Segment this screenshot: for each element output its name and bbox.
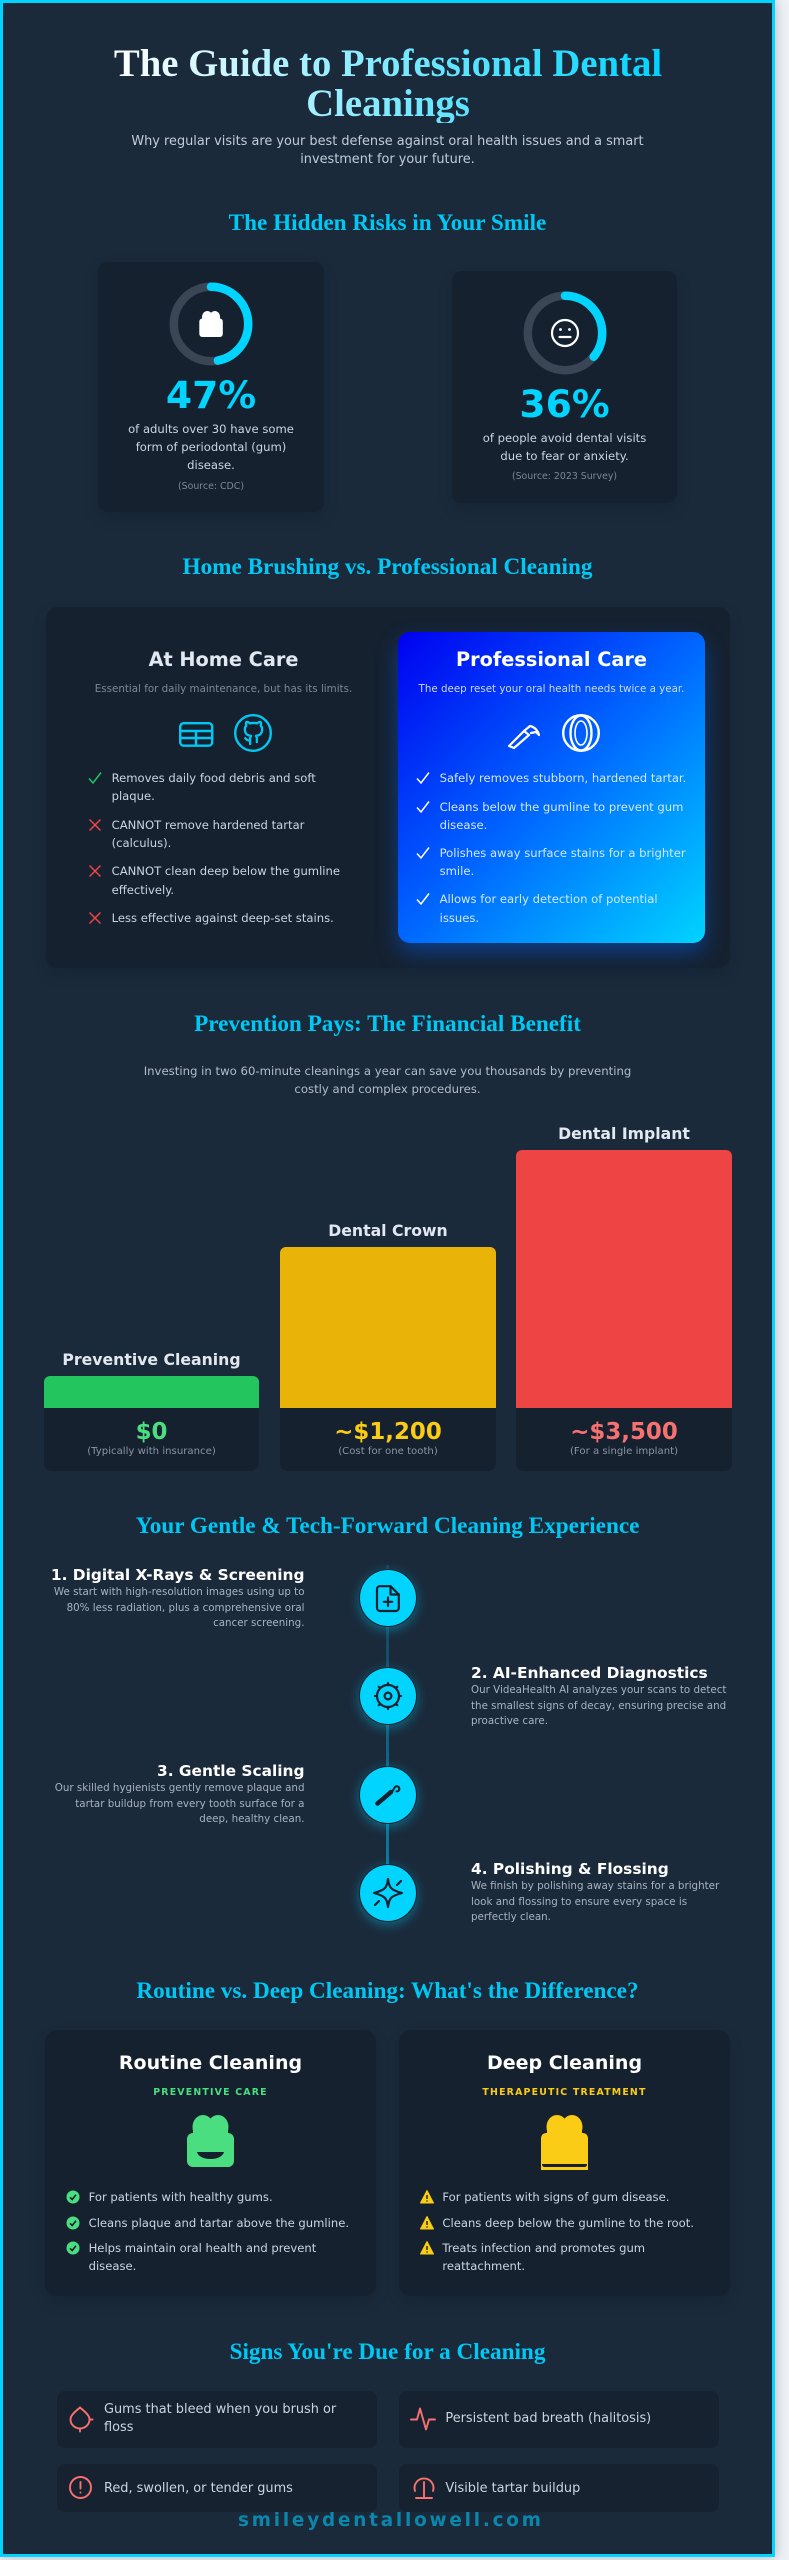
sign: tartar buildup [399,2464,719,2512]
step 3 icon [360,1767,416,1823]
home list item: cross [89,818,304,850]
home list item: check: Removes daily food debris and soft [112,771,316,785]
sign: red gums [57,2464,377,2512]
timeline connector [386,1565,389,1906]
step 4 description: We finish by polishing away stains for a brighter [471,1880,719,1892]
icon: github circle [234,714,272,752]
stat description: form of periodontal (gum) [136,440,286,454]
step 2 text [471,1664,726,1727]
footer website: smileydentallowell.com [238,2510,544,2531]
heading: signs: Signs You're Due for a Cleaning [230,2339,545,2365]
step 2 description [471,1684,726,1727]
sign: bleeding gums [57,2391,377,2448]
step 3 description: Our skilled hygienists gently remove plaque and [55,1782,304,1794]
sign text: Red, swollen, or tender gums [104,2480,293,2496]
stat description [128,422,294,472]
subtitle [131,134,644,166]
home list item: check [88,771,316,803]
subtitle: investment for your future. [300,152,475,166]
bar value box [280,1408,496,1471]
icon: pulse [410,2407,436,2431]
bar label: Dental Crown [328,1221,448,1240]
panel: deep cleaning [399,2030,730,2296]
pro list item: disease. [440,818,487,832]
routine item [66,2241,316,2273]
donut chart with tooth icon [170,282,252,366]
deep title: Deep Cleaning [487,2052,642,2074]
bar value box [516,1408,732,1471]
step 3 description: tartar buildup from every tooth surface for a [75,1798,304,1810]
value: ~$1,200 [334,1419,442,1445]
heading: financial benefit: Prevention Pays: The Financial Benefit [194,1010,581,1036]
deep tag: THERAPEUTIC TREATMENT [482,2087,647,2098]
step 1 text [51,1566,304,1629]
sign: bad breath [399,2391,719,2448]
bar chart: costs [44,1124,732,1471]
step 4 description: perfectly clean. [471,1911,551,1923]
pro list item [416,800,683,832]
professional title: Professional Care [456,648,647,671]
stat number: 47% [166,373,256,417]
step 4 description [471,1880,720,1923]
step 4 title: 4. Polishing & Flossing [471,1860,669,1878]
step 4 description: look and flossing to ensure every space is [471,1896,687,1908]
at home title: At Home Care [149,648,298,671]
icon: smiling tooth [187,2115,234,2167]
pro list item: issues. [440,910,479,924]
sign text [104,2402,336,2435]
subtitle: Why regular visits are your best defense against oral health issues and a smart [131,134,644,148]
bar: dental crown [280,1221,496,1471]
home list item: cross: CANNOT clean deep below the gumline [112,864,340,878]
bar: preventive cleaning [44,1350,259,1471]
bar label: Preventive Cleaning [62,1350,241,1369]
stat description: of people avoid dental visits [483,431,646,445]
icon: alert circle [69,2476,92,2499]
step 2 description: proactive care. [471,1715,548,1727]
panel: professional care [398,632,705,943]
step 3 description: deep, healthy clean. [199,1813,304,1825]
stat description: due to fear or anxiety. [500,449,629,463]
step 3 description [55,1782,304,1825]
title: The Guide to Professional Dental [114,42,662,85]
source: (Source: CDC) [178,480,244,492]
bar fill [280,1247,496,1408]
pro list item: Polishes away surface stains for a brighter [440,846,686,860]
home list item: cross: Less effective against deep-set stains. [112,911,334,925]
sign text: Visible tartar buildup [445,2480,580,2496]
icon: dental tool [508,724,540,750]
icon: tooth with gumline [541,2115,588,2170]
routine item: disease. [89,2259,136,2273]
heading: cleaning experience: Your Gentle & Tech-Forward Cleaning Experience [136,1513,639,1539]
icon: arc on stem [413,2476,435,2500]
value note: (Cost for one tooth) [338,1446,438,1457]
routine title: Routine Cleaning [119,2052,302,2074]
step 1 description: cancer screening. [213,1617,304,1629]
routine item: Helps maintain oral health and prevent [89,2241,316,2255]
financial intro text: Investing in two 60-minute cleanings a year can save you thousands by preventing [144,1064,631,1078]
pro list item: Safely removes stubborn, hardened tartar. [440,771,686,785]
bar value box [44,1408,259,1471]
step 2 description: Our VideaHealth AI analyzes your scans to detect [471,1684,726,1696]
stat number: 36% [519,382,610,426]
step 1 title: 1. Digital X-Rays & Screening [51,1566,304,1584]
deep item: reattachment. [442,2259,525,2273]
step 1 description [54,1586,304,1629]
deep item: For patients with signs of gum disease. [442,2190,669,2204]
pro list item [416,846,686,878]
home list item: cross: CANNOT remove hardened tartar [112,818,304,832]
stat description [483,431,646,463]
stat description: disease. [187,458,235,472]
sign text: Gums that bleed when you brush or [104,2402,336,2417]
pro list item: smile. [440,864,474,878]
deep item: Treats infection and promotes gum [442,2241,645,2255]
step 3 text [55,1762,304,1825]
pro list item: Cleans below the gumline to prevent gum [440,800,683,814]
financial intro text [144,1064,631,1096]
step 1 description: 80% less radiation, plus a comprehensive oral [67,1602,304,1614]
panel: comparison [46,607,730,968]
financial intro text: costly and complex procedures. [294,1082,481,1096]
at home subtitle: Essential for daily maintenance, but has its limits. [95,683,352,695]
bar: dental implant [516,1124,732,1471]
step 1 icon [360,1570,416,1626]
home list item: cross [89,864,340,896]
professional subtitle: The deep reset your oral health needs twice a year. [419,683,684,695]
home list item: cross: effectively. [112,882,174,896]
value note: (Typically with insurance) [87,1446,216,1457]
panel: 47 percent stat [98,262,324,512]
bar label: Dental Implant [558,1124,690,1143]
bar fill [44,1376,259,1408]
pro list item [416,892,658,924]
sign text: floss [104,2420,133,2435]
title: Cleanings [306,82,470,124]
step 2 icon [360,1668,416,1724]
source: (Source: 2023 Survey) [512,471,617,482]
home list item: check: plaque. [112,789,155,803]
routine tag: PREVENTIVE CARE [153,2087,268,2098]
icon: table [179,722,214,747]
routine item: For patients with healthy gums. [89,2190,273,2204]
stat description: of adults over 30 have some [128,422,294,436]
sign text: Persistent bad breath (halitosis) [445,2411,651,2426]
value: ~$3,500 [570,1419,678,1445]
value note: (For a single implant) [570,1446,678,1457]
step 1 description: We start with high-resolution images using up to [54,1586,304,1598]
bar fill [516,1150,732,1408]
step 3 title: 3. Gentle Scaling [157,1762,304,1780]
routine item: Cleans plaque and tartar above the gumline. [89,2216,349,2230]
heading: hidden risks: The Hidden Risks in Your Smile [229,210,546,236]
heading: routine vs deep: Routine vs. Deep Cleaning: What's the Difference? [136,1978,639,2004]
pro list item: Allows for early detection of potential [440,892,658,906]
step 2 title: 2. AI-Enhanced Diagnostics [471,1664,708,1682]
icon: globe ring [562,714,600,752]
icon: blood drop [70,2406,94,2432]
step 2 description: the smallest signs of decay, ensuring precise and [471,1700,726,1712]
title [113,44,663,123]
home list item: cross: (calculus). [112,836,171,850]
panel: 36 percent stat [452,271,677,503]
deep item [420,2241,645,2273]
donut chart with face icon [524,292,606,374]
deep item: Cleans deep below the gumline to the root. [442,2216,694,2230]
heading: home vs professional: Home Brushing vs. Professional Cleaning [183,554,592,580]
panel: routine cleaning [45,2030,376,2296]
value: $0 [136,1419,167,1445]
step 4 text [471,1860,720,1923]
step 4 icon [360,1865,416,1921]
